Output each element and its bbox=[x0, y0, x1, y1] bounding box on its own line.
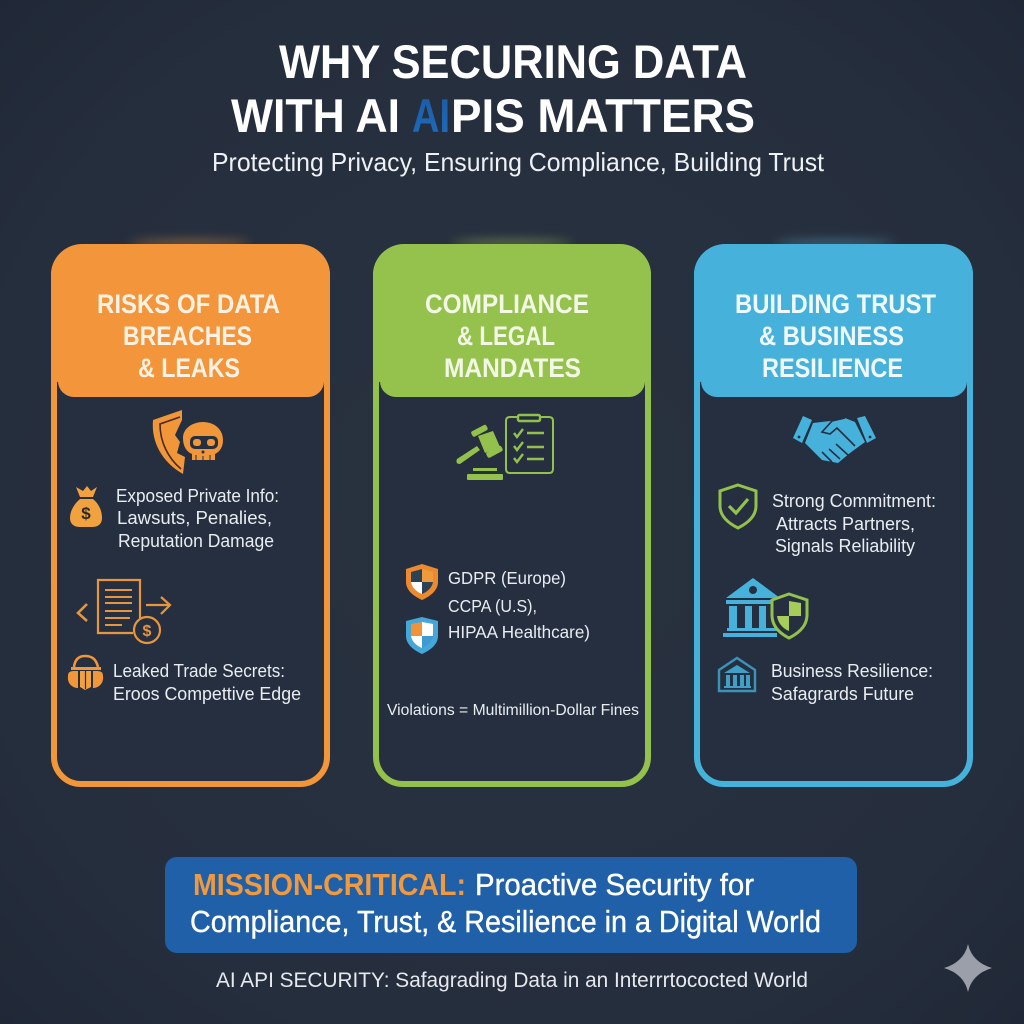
heading: risks: BREACHES bbox=[123, 321, 252, 351]
text: strong commitment: Attracts Partners, bbox=[776, 513, 915, 534]
icon: shield check bbox=[720, 485, 756, 528]
title: AI bbox=[412, 89, 450, 142]
text: strong commitment bbox=[772, 490, 936, 556]
heading: compliance: COMPLIANCE bbox=[425, 289, 589, 319]
text: violations: Violations = Multimillion-Dollar Fines bbox=[387, 702, 639, 719]
heading: compliance bbox=[425, 289, 589, 383]
heading: risks: & LEAKS bbox=[138, 353, 240, 383]
text: exposed private info: Lawsuts, Penalies, bbox=[117, 507, 272, 528]
icon: document with coin and arrows bbox=[78, 580, 170, 643]
text: leaked trade secrets bbox=[113, 660, 301, 704]
text: regulations list bbox=[448, 568, 590, 642]
heading: trust: RESILIENCE bbox=[762, 353, 903, 383]
text: regulations list: CCPA (U.S), bbox=[448, 596, 537, 616]
icon: cracked shield and skull bbox=[153, 410, 223, 474]
icon: document with coin and arrows: $ bbox=[143, 623, 152, 640]
text: regulations list: HIPAA Healthcare) bbox=[448, 622, 590, 642]
title: PIS MATTERS bbox=[451, 89, 755, 142]
icon: bank with shield bbox=[723, 578, 807, 638]
callout banner bbox=[165, 857, 857, 953]
text: exposed private info: Reputation Damage bbox=[118, 530, 274, 551]
title: WHY SECURING DATA bbox=[279, 35, 747, 88]
heading: trust bbox=[735, 289, 936, 383]
title bbox=[231, 35, 755, 142]
panel: building trust and business resilience bbox=[694, 240, 973, 784]
heading: risks bbox=[97, 289, 280, 383]
panel header: risks bbox=[51, 244, 330, 397]
subtitle: Protecting Privacy, Ensuring Compliance, Building Trust bbox=[212, 147, 825, 177]
heading: compliance: & LEGAL bbox=[457, 321, 555, 351]
panel header: trust bbox=[694, 244, 973, 397]
text: strong commitment: Signals Reliability bbox=[775, 535, 916, 556]
icon: helmet bbox=[68, 656, 103, 690]
text: exposed private info bbox=[116, 485, 279, 551]
panel header: compliance bbox=[373, 244, 651, 397]
panel: compliance and legal mandates bbox=[373, 240, 651, 784]
heading: trust: BUILDING TRUST bbox=[735, 289, 936, 319]
icon: orange shield bbox=[406, 564, 438, 600]
heading: compliance: MANDATES bbox=[444, 353, 581, 383]
icon: handshake bbox=[793, 416, 876, 463]
footer tagline: AI API SECURITY: Safagrading Data in an Interrrtococted World bbox=[216, 969, 808, 992]
text: leaked trade secrets: Leaked Trade Secrets: bbox=[113, 660, 285, 681]
icon: blue shield bbox=[406, 617, 438, 654]
text: exposed private info: Exposed Private Info: bbox=[116, 485, 279, 506]
heading: risks: RISKS OF DATA bbox=[97, 289, 280, 319]
text: business resilience: Business Resilience: bbox=[771, 660, 933, 681]
callout banner: MISSION-CRITICAL: bbox=[193, 867, 466, 902]
callout banner: Proactive Security for bbox=[475, 867, 754, 902]
icon: money bag: $ bbox=[81, 504, 91, 523]
text: regulations list: GDPR (Europe) bbox=[448, 568, 566, 588]
text: business resilience bbox=[771, 660, 933, 704]
text: leaked trade secrets: Eroos Compettive Edge bbox=[113, 683, 301, 704]
panel: risks of data breaches bbox=[51, 240, 330, 784]
icon: sparkle bbox=[944, 944, 992, 992]
text: strong commitment: Strong Commitment: bbox=[772, 490, 936, 511]
text: business resilience: Safagrards Future bbox=[771, 683, 914, 704]
icon: gavel and clipboard bbox=[456, 415, 553, 480]
icon: small bank bbox=[719, 658, 755, 691]
heading: trust: & BUSINESS bbox=[759, 321, 904, 351]
title: WITH AI bbox=[231, 89, 400, 142]
callout banner: Compliance, Trust, & Resilience in a Digital World bbox=[190, 904, 821, 939]
icon: money bag bbox=[70, 486, 102, 527]
